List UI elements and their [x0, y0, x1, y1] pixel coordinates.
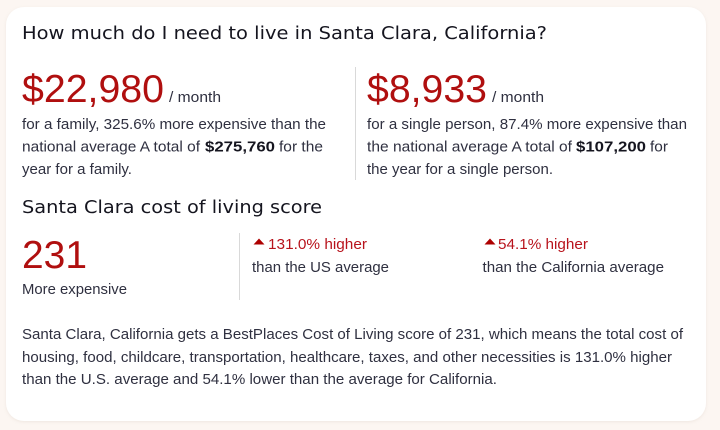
family per month label: / month: [169, 90, 221, 106]
summary paragraph: housing, food, childcare, transportation, healthcare, taxes, and other necessities is 131.0% higher: [22, 350, 672, 366]
summary paragraph: than the U.S. average and 54.1% lower than the average for California.: [22, 372, 497, 388]
single person description: the national average A total of: [367, 140, 573, 156]
title: How much do I need to live in Santa Clara, California?: [22, 24, 547, 44]
family description: year for a family.: [22, 162, 132, 178]
California comparison: [482, 237, 664, 276]
California percent higher: 54.1% higher: [498, 237, 588, 253]
score number: 231: [22, 234, 87, 277]
family description: [22, 117, 326, 178]
US percent higher: 131.0% higher: [268, 237, 367, 253]
family description: for the: [279, 140, 323, 156]
single person monthly cost: $8,933: [367, 68, 487, 111]
score block: [22, 234, 127, 298]
California comparison label: than the California average: [482, 260, 664, 276]
icon: up triangle: [484, 238, 496, 244]
family cost block: [22, 68, 326, 178]
single person description: the year for a single person.: [367, 162, 553, 178]
summary paragraph: [22, 327, 684, 388]
summary paragraph: Santa Clara, California gets a BestPlaces Cost of Living score of 231, which means the total cost of: [22, 327, 684, 343]
single person cost block: [367, 68, 687, 178]
score label: More expensive: [22, 282, 127, 298]
US comparison: [252, 237, 389, 276]
family description: $275,760: [205, 140, 275, 156]
family description: for a family, 325.6% more expensive than the: [22, 117, 326, 133]
icon: up triangle: [254, 238, 264, 244]
single person per month label: / month: [492, 90, 544, 106]
single person description: $107,200: [576, 140, 646, 156]
single person description: for a single person, 87.4% more expensive than: [367, 117, 687, 133]
family description: national average A total of: [22, 140, 201, 156]
US comparison label: than the US average: [252, 260, 389, 276]
single person description: for: [650, 140, 668, 156]
single person description: [367, 117, 687, 178]
score heading: Santa Clara cost of living score: [22, 198, 322, 218]
family monthly cost: $22,980: [22, 68, 164, 111]
